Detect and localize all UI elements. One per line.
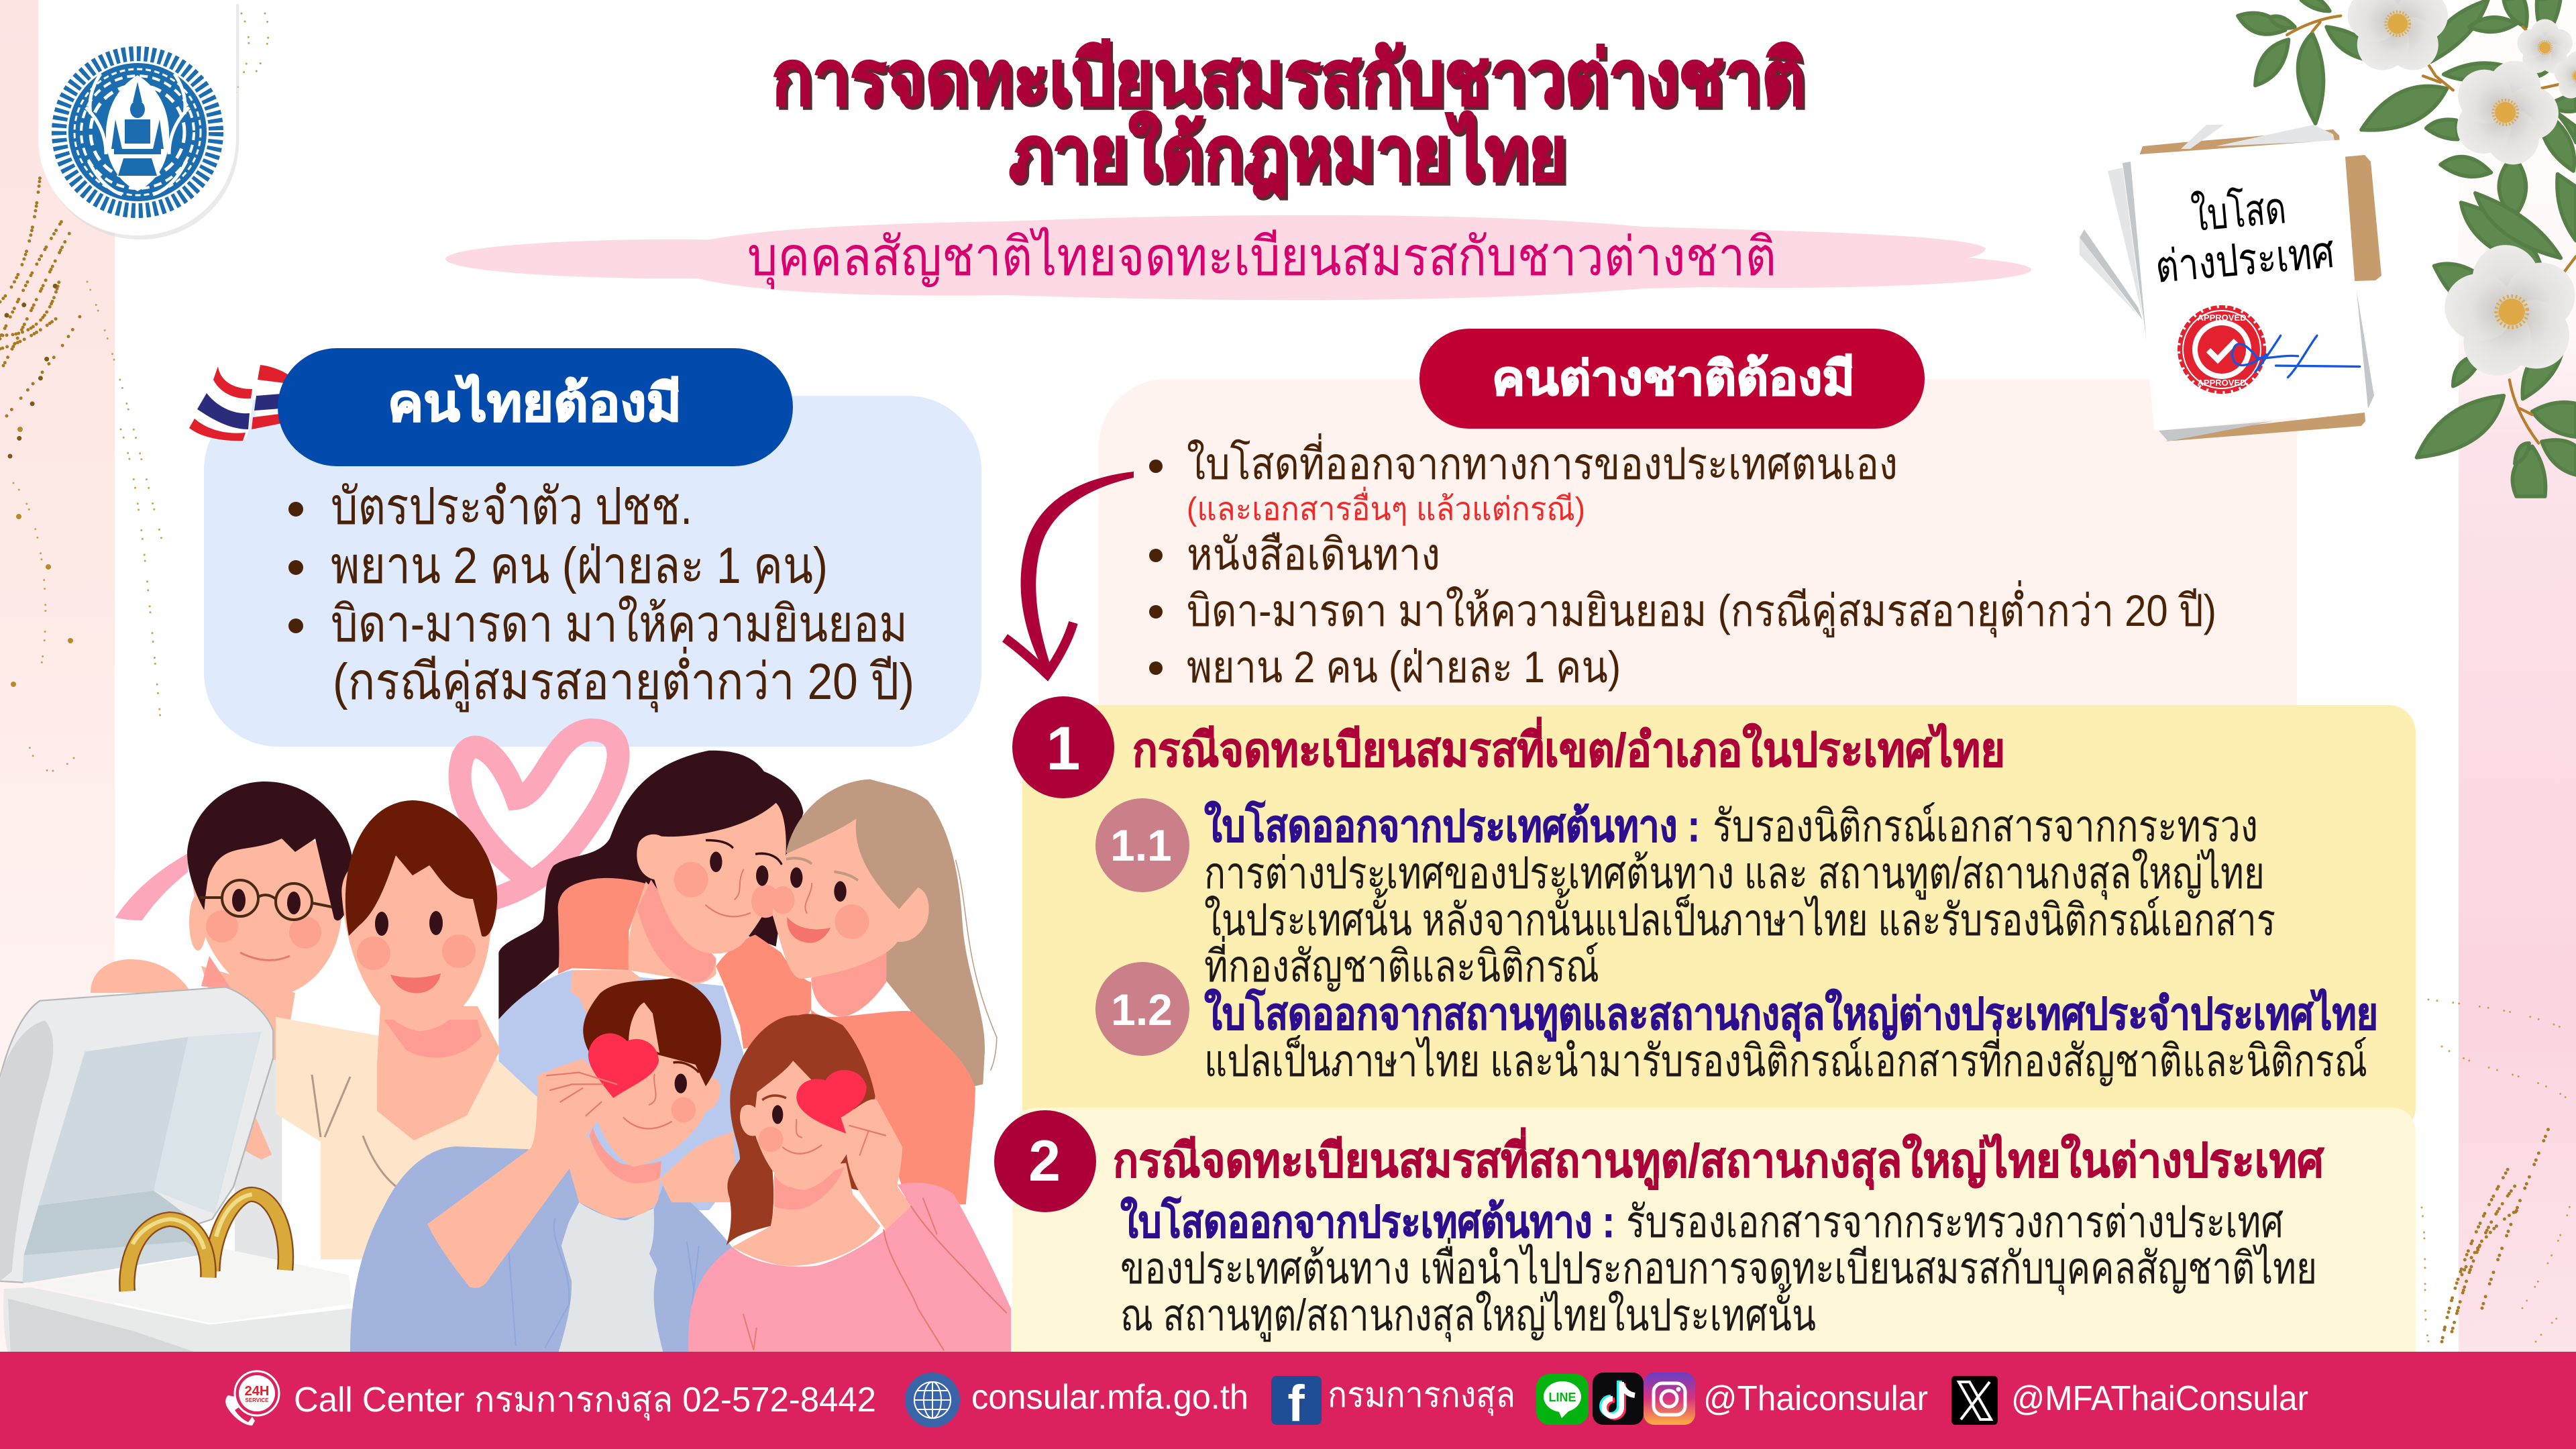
panel: case 2 registration abroad	[994, 1108, 2416, 1355]
logo tab	[38, 0, 239, 239]
gold dust decoration right	[2422, 1000, 2573, 1342]
approved stamp	[2180, 308, 2263, 391]
man with glasses	[91, 782, 354, 1275]
icon: instagram	[1644, 1373, 1695, 1425]
list: foreigner	[1149, 433, 2216, 692]
website text: consular.mfa.go.th	[971, 1378, 1248, 1417]
approved stamp: APPROVED	[2198, 313, 2246, 323]
badge 2	[994, 1110, 1096, 1212]
text case 2: รับรองเอกสารจากกระทรวงการต่างประเทศ	[1626, 1197, 2284, 1246]
list: Thai person: บัตรประจำตัว ปชช.	[331, 478, 692, 535]
icon: tiktok	[1593, 1373, 1644, 1425]
approved stamp: APPROVED	[2198, 378, 2246, 388]
title: การจดทะเบียนสมรสกับชาวต่างชาติ	[772, 36, 1805, 120]
man in cream shirt	[276, 800, 541, 1259]
facebook name: กรมการกงสุล	[1328, 1376, 1515, 1416]
icon: x	[1951, 1376, 1998, 1425]
text 1.1: รับรองนิติกรณ์เอกสารจากกระทรวง	[1713, 801, 2258, 851]
heading pill: Thai person: คนไทยต้องมี	[388, 374, 682, 432]
badge 1.2: 1.2	[1111, 985, 1173, 1034]
heading case 1: กรณีจดทะเบียนสมรสที่เขต/อำเภอในประเทศไทย	[1132, 716, 2005, 776]
handle mfa: @MFAThaiConsular	[2011, 1379, 2308, 1418]
icon: line: LINE	[1548, 1391, 1576, 1404]
panel: Thai person requirements	[189, 348, 981, 747]
handle thaiconsular: @Thaiconsular	[1703, 1379, 1928, 1418]
couple in front	[350, 978, 1011, 1352]
text case 2: ใบโสดออกจากประเทศต้นทาง :	[1120, 1195, 1615, 1246]
icon: 24h call center: SERVICE	[246, 1397, 269, 1403]
text case 2	[1120, 1195, 2317, 1342]
ring box	[0, 987, 398, 1353]
badge 1.2	[1095, 962, 1189, 1056]
list: Thai person: (กรณีคู่สมรสอายุต่ำกว่า 20 ปี)	[333, 647, 914, 712]
icon: facebook	[1271, 1375, 1322, 1432]
text 1.1: การต่างประเทศของประเทศต้นทาง และ สถานทูต/สถานกงสุลใหญ่ไทย	[1204, 848, 2265, 900]
heading pill: Thai person	[278, 348, 793, 466]
icon: single-status document on clipboard	[2080, 125, 2381, 441]
dark-haired woman	[498, 751, 811, 1210]
icon: facebook: f	[1287, 1375, 1305, 1432]
list: Thai person: พยาน 2 คน (ฝ่ายละ 1 คน)	[331, 537, 828, 594]
two women at back	[498, 751, 997, 1210]
icon: line	[1536, 1374, 1589, 1425]
badge 2: 2	[1028, 1129, 1061, 1193]
icon: single-status document on clipboard: ต่างประเทศ	[2153, 227, 2337, 292]
illustration: couples and wedding rings	[0, 730, 1011, 1353]
title	[772, 36, 1808, 200]
panel: case 1 registration in Thailand	[1012, 696, 2416, 1134]
text case 2: ของประเทศต้นทาง เพื่อนำไปประกอบการจดทะเบียนสมรสกับบุคคลสัญชาติไทย	[1120, 1238, 2317, 1295]
badge 1.1: 1.1	[1110, 820, 1172, 870]
heading case 2: กรณีจดทะเบียนสมรสที่สถานทูต/สถานกงสุลใหญ่ไทยในต่างประเทศ	[1113, 1127, 2324, 1190]
list: foreigner: (และเอกสารอื่นๆ แล้วแต่กรณี)	[1187, 486, 1585, 527]
title: ภายใต้กฎหมายไทย	[1012, 115, 1570, 200]
arrow	[1005, 472, 1134, 674]
badge 1	[1012, 696, 1114, 798]
text 1.1: ในประเทศนั้น หลังจากนั้นแปลเป็นภาษาไทย และรับรองนิติกรณ์เอกสาร	[1204, 888, 2275, 945]
panel: foreigner requirements	[1099, 329, 2297, 711]
list: Thai person	[288, 478, 914, 712]
footer bar	[0, 1352, 2576, 1449]
subtitle banner	[445, 215, 2031, 300]
icon: single-status document on clipboard: ใบโสด	[2190, 182, 2288, 240]
blonde woman	[771, 780, 997, 1204]
text 1.2	[1204, 987, 2378, 1086]
list: Thai person: บิดา-มารดา มาให้ความยินยอม	[331, 595, 908, 653]
title: ภายใต้กฎหมายไทย	[1009, 111, 1567, 197]
badge 1.1	[1095, 798, 1189, 892]
icon: Thai flag	[189, 365, 290, 441]
title: การจดทะเบียนสมรสกับชาวต่างชาติ	[775, 40, 1808, 123]
call center text: Call Center กรมการกงสุล 02-572-8442	[294, 1381, 876, 1421]
list: foreigner: พยาน 2 คน (ฝ่ายละ 1 คน)	[1187, 642, 1621, 692]
heading pill: foreigner: คนต่างชาติต้องมี	[1492, 352, 1855, 405]
subtitle banner: บุคคลสัญชาติไทยจดทะเบียนสมรสกับชาวต่างชาติ	[747, 227, 1776, 289]
signature	[2232, 335, 2360, 378]
text 1.2: ใบโสดออกจากสถานทูตและสถานกงสุลใหญ่ต่างประเทศประจำประเทศไทย	[1204, 987, 2378, 1042]
icon: globe	[905, 1373, 960, 1428]
icon: 24h call center: 24H	[245, 1384, 269, 1399]
girl with heart	[688, 1014, 1011, 1352]
list: foreigner: บิดา-มารดา มาให้ความยินยอม (กรณีคู่สมรสอายุต่ำกว่า 20 ปี)	[1187, 580, 2216, 638]
gold rings	[127, 1194, 286, 1291]
text 1.1: ที่กองสัญชาติและนิติกรณ์	[1204, 936, 1599, 991]
text 1.1	[1204, 800, 2275, 991]
list: foreigner: หนังสือเดินทาง	[1187, 529, 1440, 579]
emblem	[59, 54, 216, 211]
pink ribbon heart	[115, 730, 619, 920]
heading pill: foreigner	[1419, 329, 1925, 429]
text case 2: ณ สถานทูต/สถานกงสุลใหญ่ไทยในประเทศนั้น	[1120, 1283, 1816, 1342]
list: foreigner: ใบโสดที่ออกจากทางการของประเทศตนเอง	[1187, 433, 1898, 488]
badge 1: 1	[1046, 714, 1081, 783]
boy with heart	[350, 978, 737, 1352]
icon: 24h call center	[225, 1371, 279, 1426]
icon: flower branch	[2238, 0, 2576, 496]
gold dust decoration left	[0, 13, 268, 771]
text 1.1: ใบโสดออกจากประเทศต้นทาง :	[1204, 800, 1700, 851]
